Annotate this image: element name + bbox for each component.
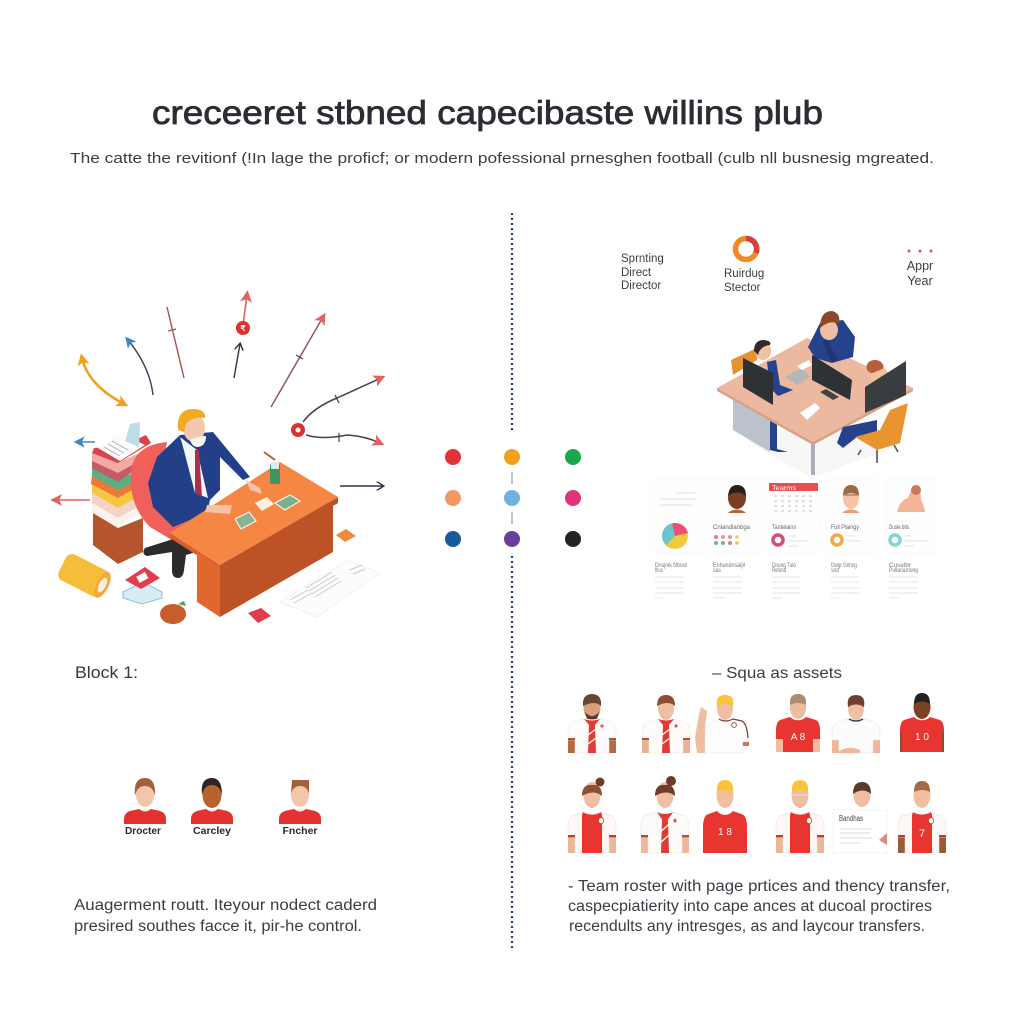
- keyboard: [820, 389, 839, 400]
- label: running director: Stector: [724, 282, 761, 294]
- desk top: [717, 338, 913, 442]
- text block: left description: presired southes facce it, pir-he control.: [74, 918, 362, 935]
- documents on floor: [280, 560, 380, 617]
- list columns: thus: [655, 567, 663, 574]
- tie: [195, 450, 202, 497]
- green bottle: [264, 452, 280, 484]
- seated person left: [754, 340, 793, 396]
- left person legs: [770, 420, 788, 452]
- central dotted divider: [511, 213, 513, 950]
- red-topped books: [123, 567, 162, 604]
- player 4: [776, 694, 820, 752]
- desk leg: [811, 442, 815, 475]
- laptop: [785, 368, 810, 385]
- calendar: [769, 483, 818, 511]
- beard: [190, 436, 206, 447]
- squad row 2: [568, 776, 946, 853]
- list columns: sas: [713, 567, 721, 574]
- squad row 1: [568, 693, 944, 753]
- card heading row: Cnlandlanbga: [713, 524, 750, 531]
- player 4: A 8: [791, 732, 806, 743]
- monitor 2: [812, 355, 852, 400]
- avatar: Drocter: Drocter: [125, 826, 161, 837]
- avatar: Carcley: [191, 778, 233, 837]
- right chair legs: [858, 445, 898, 463]
- avatar: Carcley: Carcley: [193, 826, 231, 837]
- player 9: 1 8: [718, 827, 732, 838]
- colour dot grid: [445, 449, 581, 547]
- floor shadow: [745, 415, 900, 478]
- list columns: [655, 562, 918, 574]
- icon: ring: [736, 238, 757, 260]
- label: appr year: Year: [907, 274, 933, 288]
- player 9: [703, 780, 747, 853]
- face: dark: [728, 485, 746, 513]
- papers on desk: [235, 512, 256, 529]
- avatar: Drocter: [124, 778, 166, 837]
- heading: block 1: Block 1:: [75, 663, 138, 682]
- player 12: 7: [919, 828, 925, 840]
- arrow: small black: [234, 344, 240, 378]
- title: creceeret stbned capecibaste willins plub: [152, 94, 823, 131]
- label: running director: Ruirdug: [724, 268, 764, 280]
- text block: right description: - Team roster with page prtices and thency transfer,: [568, 878, 950, 895]
- avatar: Fncher: [279, 780, 321, 837]
- card backgrounds: [652, 478, 936, 554]
- yellow roll: [56, 552, 114, 601]
- orange tag: [336, 529, 356, 542]
- monitor 3: [865, 361, 906, 413]
- label: appr year: Appr: [907, 259, 933, 273]
- hands: [205, 480, 262, 514]
- arrow: red left: [55, 499, 90, 501]
- label: sporting director: Sprnting: [621, 253, 664, 265]
- left chair: [731, 348, 757, 375]
- player 12: [898, 781, 946, 853]
- hair: [178, 409, 205, 432]
- illustration: manager at desk: [56, 409, 380, 624]
- player 5: [832, 695, 880, 753]
- list columns: Dwgr Gnhng: [831, 562, 857, 569]
- right orange chair: [855, 403, 908, 450]
- illustration: arrows radiating from the desk: [55, 295, 383, 500]
- desk pedestal: [733, 398, 770, 452]
- avatar: Fncher: Fncher: [282, 826, 318, 837]
- list columns: Dnsjnik Nbout: [655, 562, 687, 569]
- card heading row: [713, 524, 910, 531]
- arrow: blue curved: [128, 340, 153, 395]
- arrow: blue left: [78, 441, 95, 443]
- text block: right description: recendults any intresges, as and laycour transfers.: [569, 918, 925, 935]
- right person legs: [837, 420, 877, 448]
- list columns: Pullanamong: [889, 567, 918, 574]
- player 2: [642, 695, 690, 753]
- fruit: [160, 601, 186, 624]
- arrow: long diagonal: [271, 317, 323, 407]
- labels: top right: [621, 238, 933, 294]
- arrow: split upper: [303, 378, 381, 422]
- card heading row: Full Plaingy: [831, 524, 860, 531]
- text block: right description: caspecpiatierity into cape ances at ducoal proctires: [568, 898, 932, 915]
- card heading row: Tantelains: [772, 524, 797, 531]
- label: sporting director: Direct: [621, 267, 652, 279]
- player 11: profile card: [833, 782, 887, 853]
- chair base: [143, 538, 196, 578]
- shirt: [180, 437, 208, 498]
- colored mini dots: [714, 535, 739, 545]
- list columns: Retond: [772, 567, 786, 574]
- player 1: [568, 694, 616, 753]
- player 11: profile card: Bandhas: [839, 814, 863, 823]
- list columns: snd: [831, 567, 839, 574]
- player 8: [641, 776, 689, 853]
- arrow: orange double: [82, 358, 124, 404]
- text lines card: [660, 493, 696, 505]
- chair: [131, 442, 190, 540]
- player 10: [776, 780, 824, 853]
- text block: left description: Auagerment routt. Iteyour nodect caderd: [74, 897, 377, 914]
- paper: [800, 403, 820, 420]
- cabinet: [93, 513, 143, 564]
- arrow: dark red: [167, 307, 184, 378]
- desk: [170, 462, 338, 565]
- arrow: red up with badge: [236, 295, 250, 335]
- card heading row: Dusle bits: [889, 524, 910, 531]
- arrow: split lower: [306, 435, 380, 443]
- head: [183, 414, 205, 442]
- role avatars: [124, 778, 321, 837]
- arrow: black right: [340, 485, 383, 487]
- suit: [148, 432, 250, 527]
- list columns: Cuselbr: [889, 562, 911, 569]
- player 6: 1 0: [915, 732, 929, 743]
- ring stats: [773, 535, 900, 545]
- list columns: Dnung Tulo: [772, 562, 796, 569]
- player 6: [900, 693, 944, 752]
- list columns: Enhundnsaljil: [713, 562, 745, 569]
- face: glasses: [843, 485, 859, 513]
- icon: branch badge: [291, 423, 305, 437]
- player 7: [568, 778, 616, 853]
- monitor 1: [743, 358, 773, 405]
- heading: squad as assets: – Squa as assets: [712, 665, 842, 682]
- arrow: red up with badge: ₹: [240, 324, 246, 333]
- seated person right: [866, 360, 890, 385]
- standing person: [808, 311, 855, 363]
- calendar: Tearms: [772, 486, 796, 492]
- card grid: profiles and stats: [652, 478, 936, 598]
- book stack: [91, 422, 151, 527]
- pie chart: [662, 523, 688, 549]
- figure: skin: [897, 485, 925, 512]
- illustration: team meeting at desk: [717, 311, 913, 478]
- subtitle: The catte the revitionf (!In lage the proficf; or modern pofessional prnesghen football (culb nll busnesig mgreated.: [70, 150, 934, 167]
- label: sporting director: Director: [621, 280, 661, 292]
- red tag: [248, 608, 271, 623]
- player 3: [695, 695, 749, 753]
- icon: three dots: [908, 250, 932, 252]
